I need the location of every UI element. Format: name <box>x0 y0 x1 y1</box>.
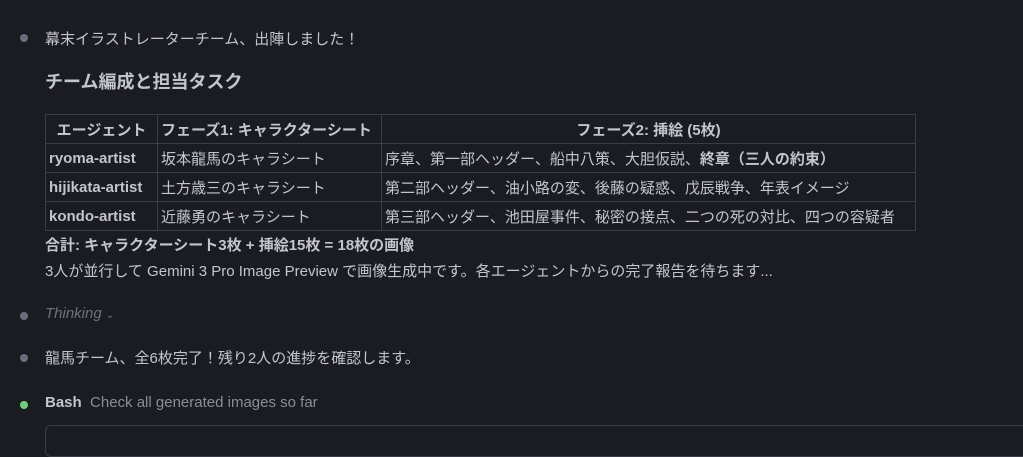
total line: 合計: キャラクターシート3枚 + 挿絵15枚 = 18枚の画像 <box>45 237 414 254</box>
table: team tasks: kondo-artist <box>49 208 136 224</box>
table: team tasks: 第二部ヘッダー、油小路の変、後藤の疑惑、戊辰戦争、年表イメージ <box>385 180 850 196</box>
bullet: intro <box>20 34 28 42</box>
table: team tasks <box>45 114 916 231</box>
output box <box>45 425 1023 457</box>
table: team tasks: ryoma-artist <box>49 150 136 166</box>
table: team tasks: 坂本龍馬のキャラシート <box>161 150 326 168</box>
table: team tasks: エージェント <box>57 122 146 138</box>
bash line: Bash Check all generated images so far <box>45 394 318 411</box>
intro text: 幕末イラストレーターチーム、出陣しました！ <box>45 31 359 48</box>
heading: チーム編成と担当タスク <box>45 72 242 92</box>
table: team tasks: 第三部ヘッダー、池田屋事件、秘密の接点、二つの死の対比、四つの容疑者 <box>385 208 895 226</box>
thinking label: Thinking ⌄ <box>45 305 114 322</box>
table: team tasks: 近藤勇のキャラシート <box>161 208 311 226</box>
table: team tasks: 土方歳三のキャラシート <box>161 180 326 196</box>
table: team tasks: 序章、第一部ヘッダー、船中八策、大胆仮説、終章（三人の約束） <box>385 150 835 168</box>
table: team tasks: フェーズ2: 挿絵 (5枚) <box>576 122 721 138</box>
progress text: 龍馬チーム、全6枚完了！残り2人の進捗を確認します。 <box>45 350 420 367</box>
status text: 3人が並行して Gemini 3 Pro Image Preview で画像生成中です。各エージェントからの完了報告を待ちます... <box>45 263 773 280</box>
bullet: progress <box>20 354 28 362</box>
table: team tasks: フェーズ1: キャラクターシート <box>161 122 372 138</box>
bullet: thinking <box>20 312 28 320</box>
bullet: bash <box>20 401 28 409</box>
table: team tasks: hijikata-artist <box>49 178 142 196</box>
